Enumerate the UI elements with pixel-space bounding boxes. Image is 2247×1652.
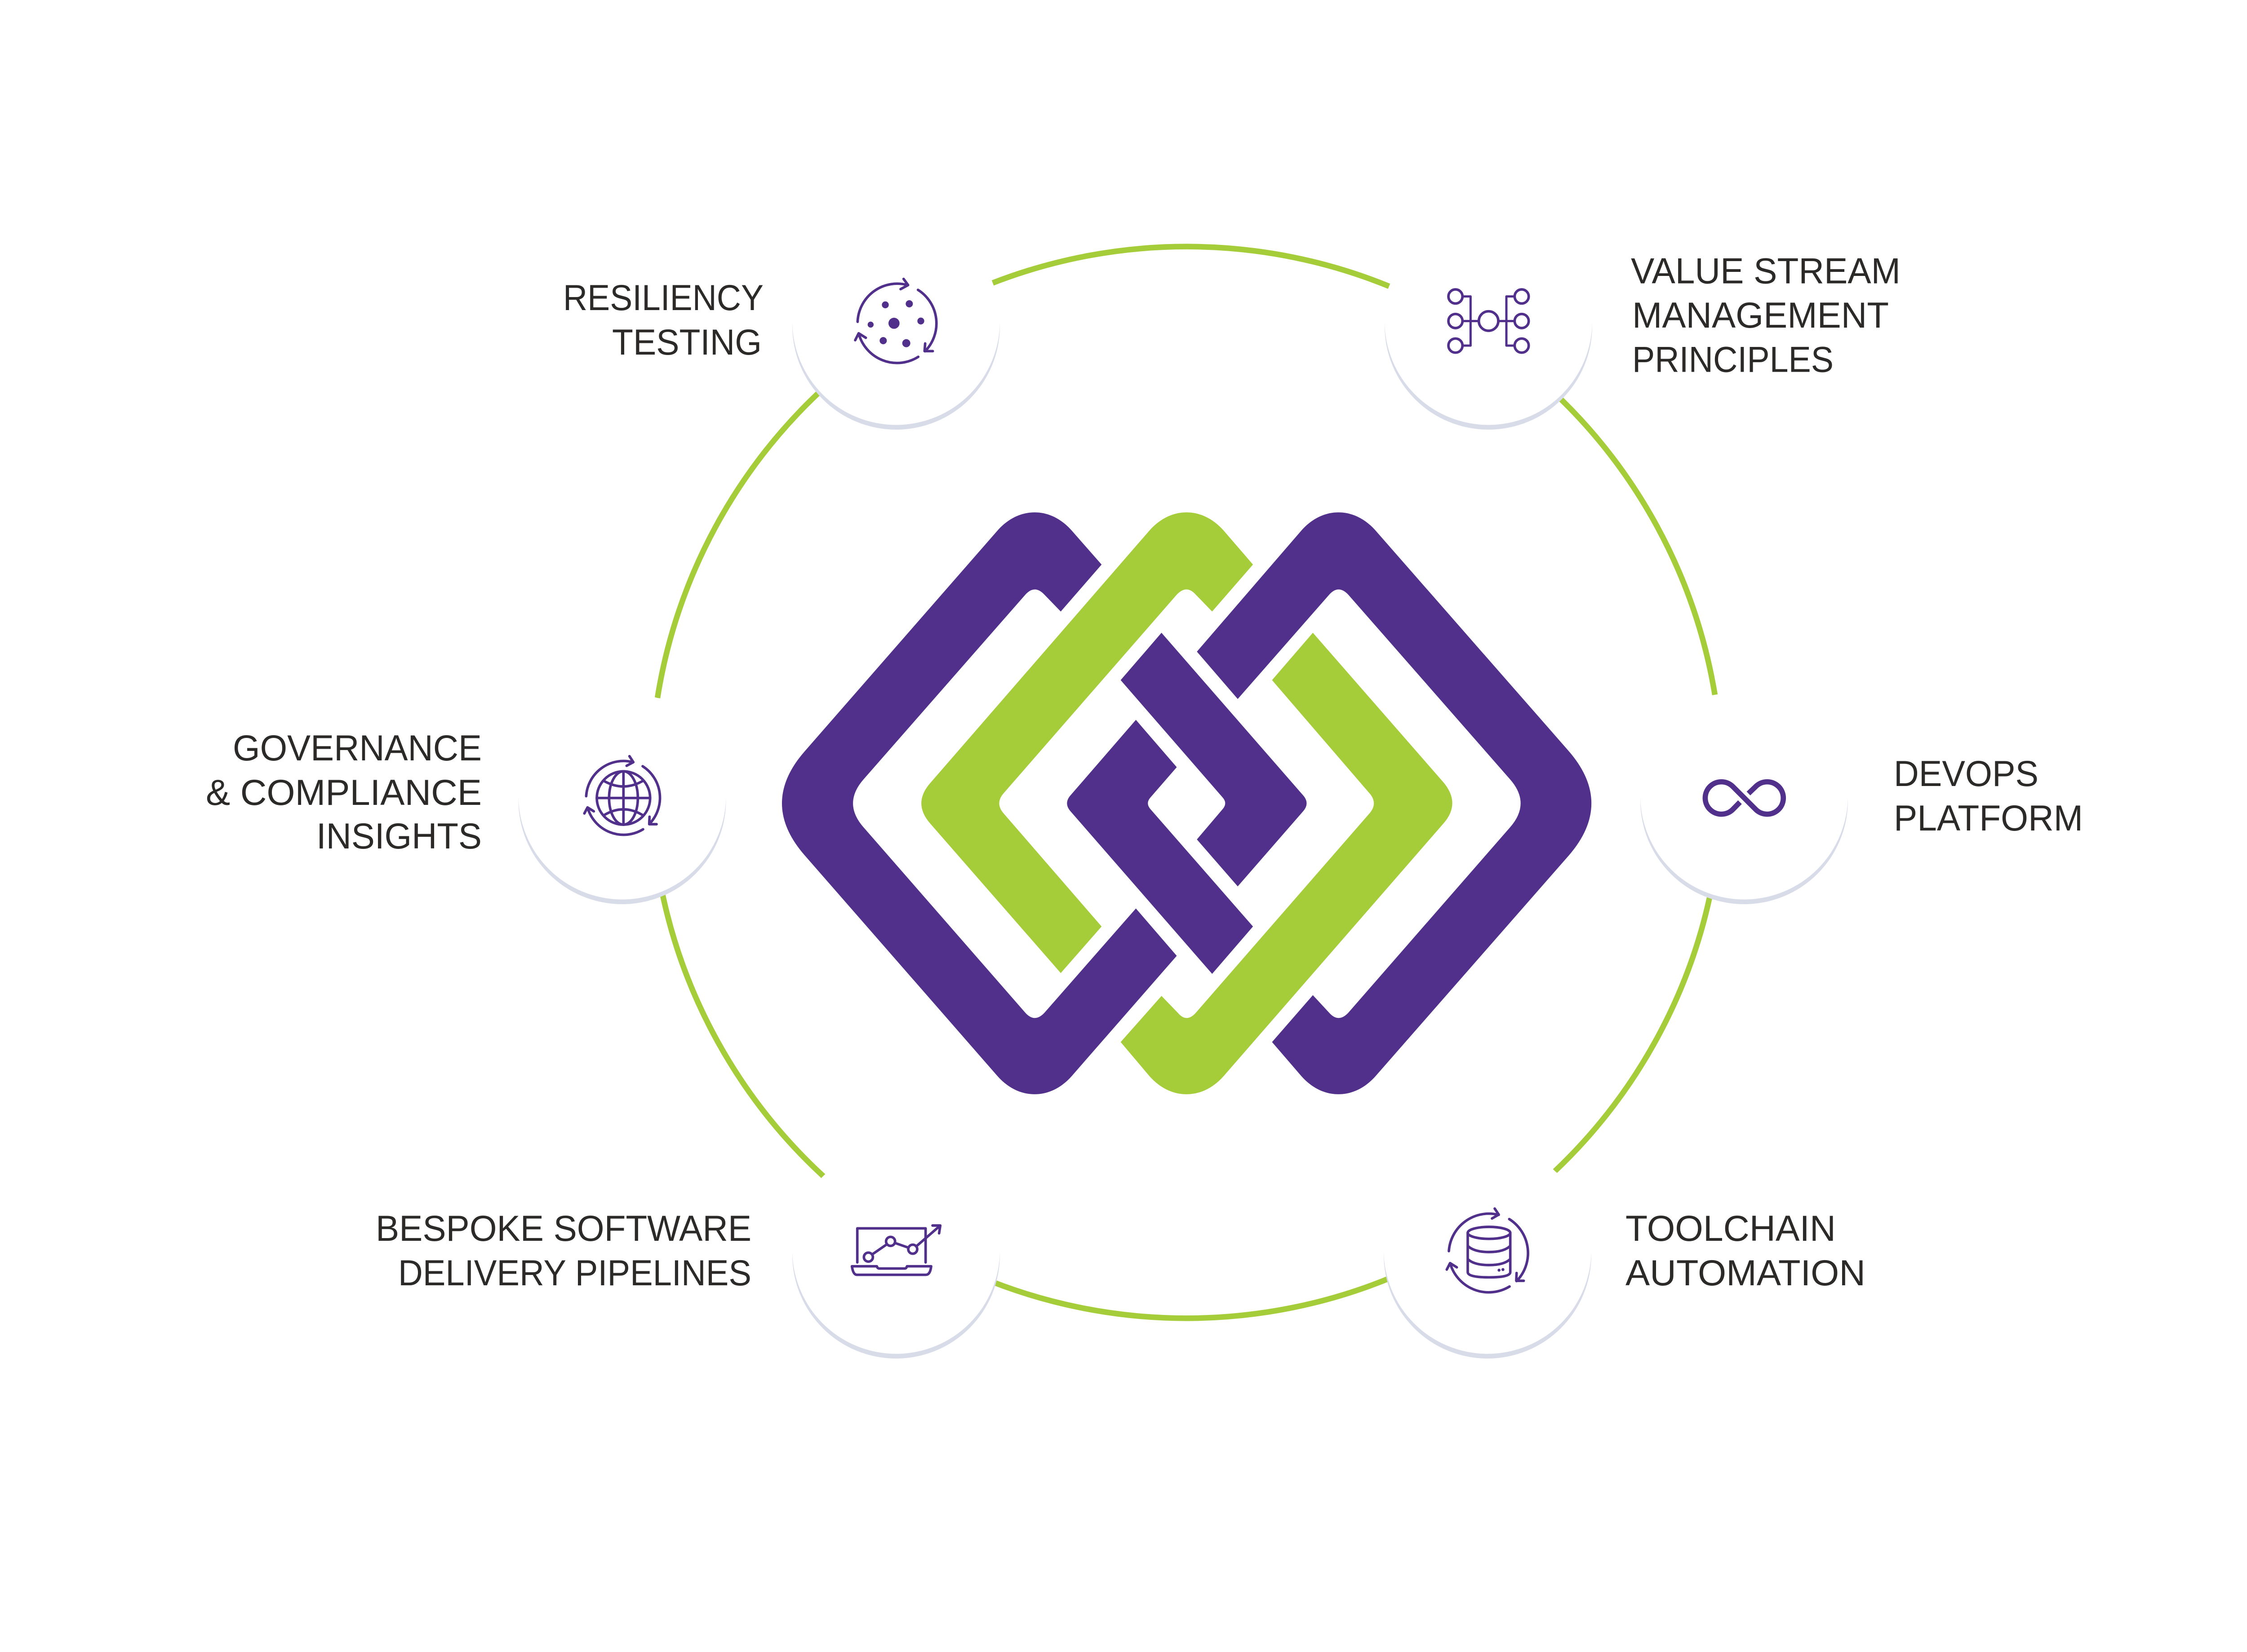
logo: centre lower purple band [1067, 720, 1253, 974]
label: toolchain automation: AUTOMATION [1625, 1253, 1865, 1293]
central interlaced logo [782, 512, 1591, 1094]
node disc [1640, 692, 1848, 900]
node disc [1385, 218, 1592, 425]
label: bespoke software delivery pipelines [376, 1208, 751, 1293]
node: toolchain automation [1384, 1146, 1865, 1359]
arc: upper left [657, 385, 827, 698]
icon: infinity loop [1705, 782, 1783, 814]
node disc [792, 1146, 1000, 1354]
label: resiliency testing: TESTING [612, 322, 762, 363]
label: value stream management principles: PRINCIPLES [1632, 340, 1834, 380]
arc: bottom [980, 1277, 1393, 1318]
node shadow [1640, 697, 1848, 904]
node disc [519, 692, 726, 900]
label: resiliency testing [563, 278, 764, 363]
arc: lower right [1555, 881, 1713, 1171]
node: bespoke software delivery pipelines [376, 1146, 1000, 1359]
logo: right green band [1121, 633, 1452, 1094]
node: governance and compliance insights [206, 692, 726, 904]
icon: cycle with dots [855, 279, 937, 363]
label: bespoke software delivery pipelines: DELIVERY PIPELINES [398, 1253, 751, 1293]
logo: left green band [921, 512, 1253, 973]
label: governance and compliance insights: & COMPLIANCE [206, 773, 482, 813]
label: governance and compliance insights: GOVERNANCE [233, 728, 482, 768]
label: toolchain automation: TOOLCHAIN [1625, 1208, 1836, 1249]
node shadow [519, 697, 726, 904]
green connecting ring [657, 247, 1715, 1318]
label: bespoke software delivery pipelines: BESPOKE SOFTWARE [376, 1208, 751, 1249]
label: governance and compliance insights [206, 728, 482, 857]
node disc [792, 218, 1000, 425]
label: toolchain automation [1625, 1208, 1865, 1293]
node shadow [1384, 1151, 1591, 1359]
logo: left purple band [782, 512, 1177, 1094]
label: value stream management principles: MANAGEMENT [1632, 295, 1889, 336]
arc: upper right [1546, 385, 1715, 695]
label: resiliency testing: RESILIENCY [563, 278, 764, 318]
node shadow [1385, 222, 1592, 430]
label: devops platform: PLATFORM [1894, 798, 2083, 839]
label: devops platform [1894, 754, 2083, 839]
node disc [1384, 1146, 1591, 1354]
node shadow [792, 1151, 1000, 1359]
arc: top [993, 247, 1389, 286]
icon: database with cycle arrows [1447, 1208, 1528, 1292]
label: value stream management principles [1631, 251, 1901, 380]
node: value stream management principles [1385, 218, 1901, 430]
arc: lower left [660, 881, 824, 1177]
label: governance and compliance insights: INSIGHTS [316, 816, 482, 857]
label: devops platform: DEVOPS [1894, 754, 2038, 794]
node: resiliency testing [563, 218, 1000, 430]
node: devops platform [1640, 692, 2083, 904]
label: value stream management principles: VALUE STREAM [1631, 251, 1901, 292]
icon: globe with cycle arrows [584, 756, 660, 835]
logo: right purple band [1197, 512, 1591, 1094]
logo: centre upper purple band [1121, 633, 1306, 886]
node shadow [792, 222, 1000, 430]
icon: laptop with rising chart [852, 1226, 940, 1275]
icon: value stream network [1448, 289, 1529, 353]
